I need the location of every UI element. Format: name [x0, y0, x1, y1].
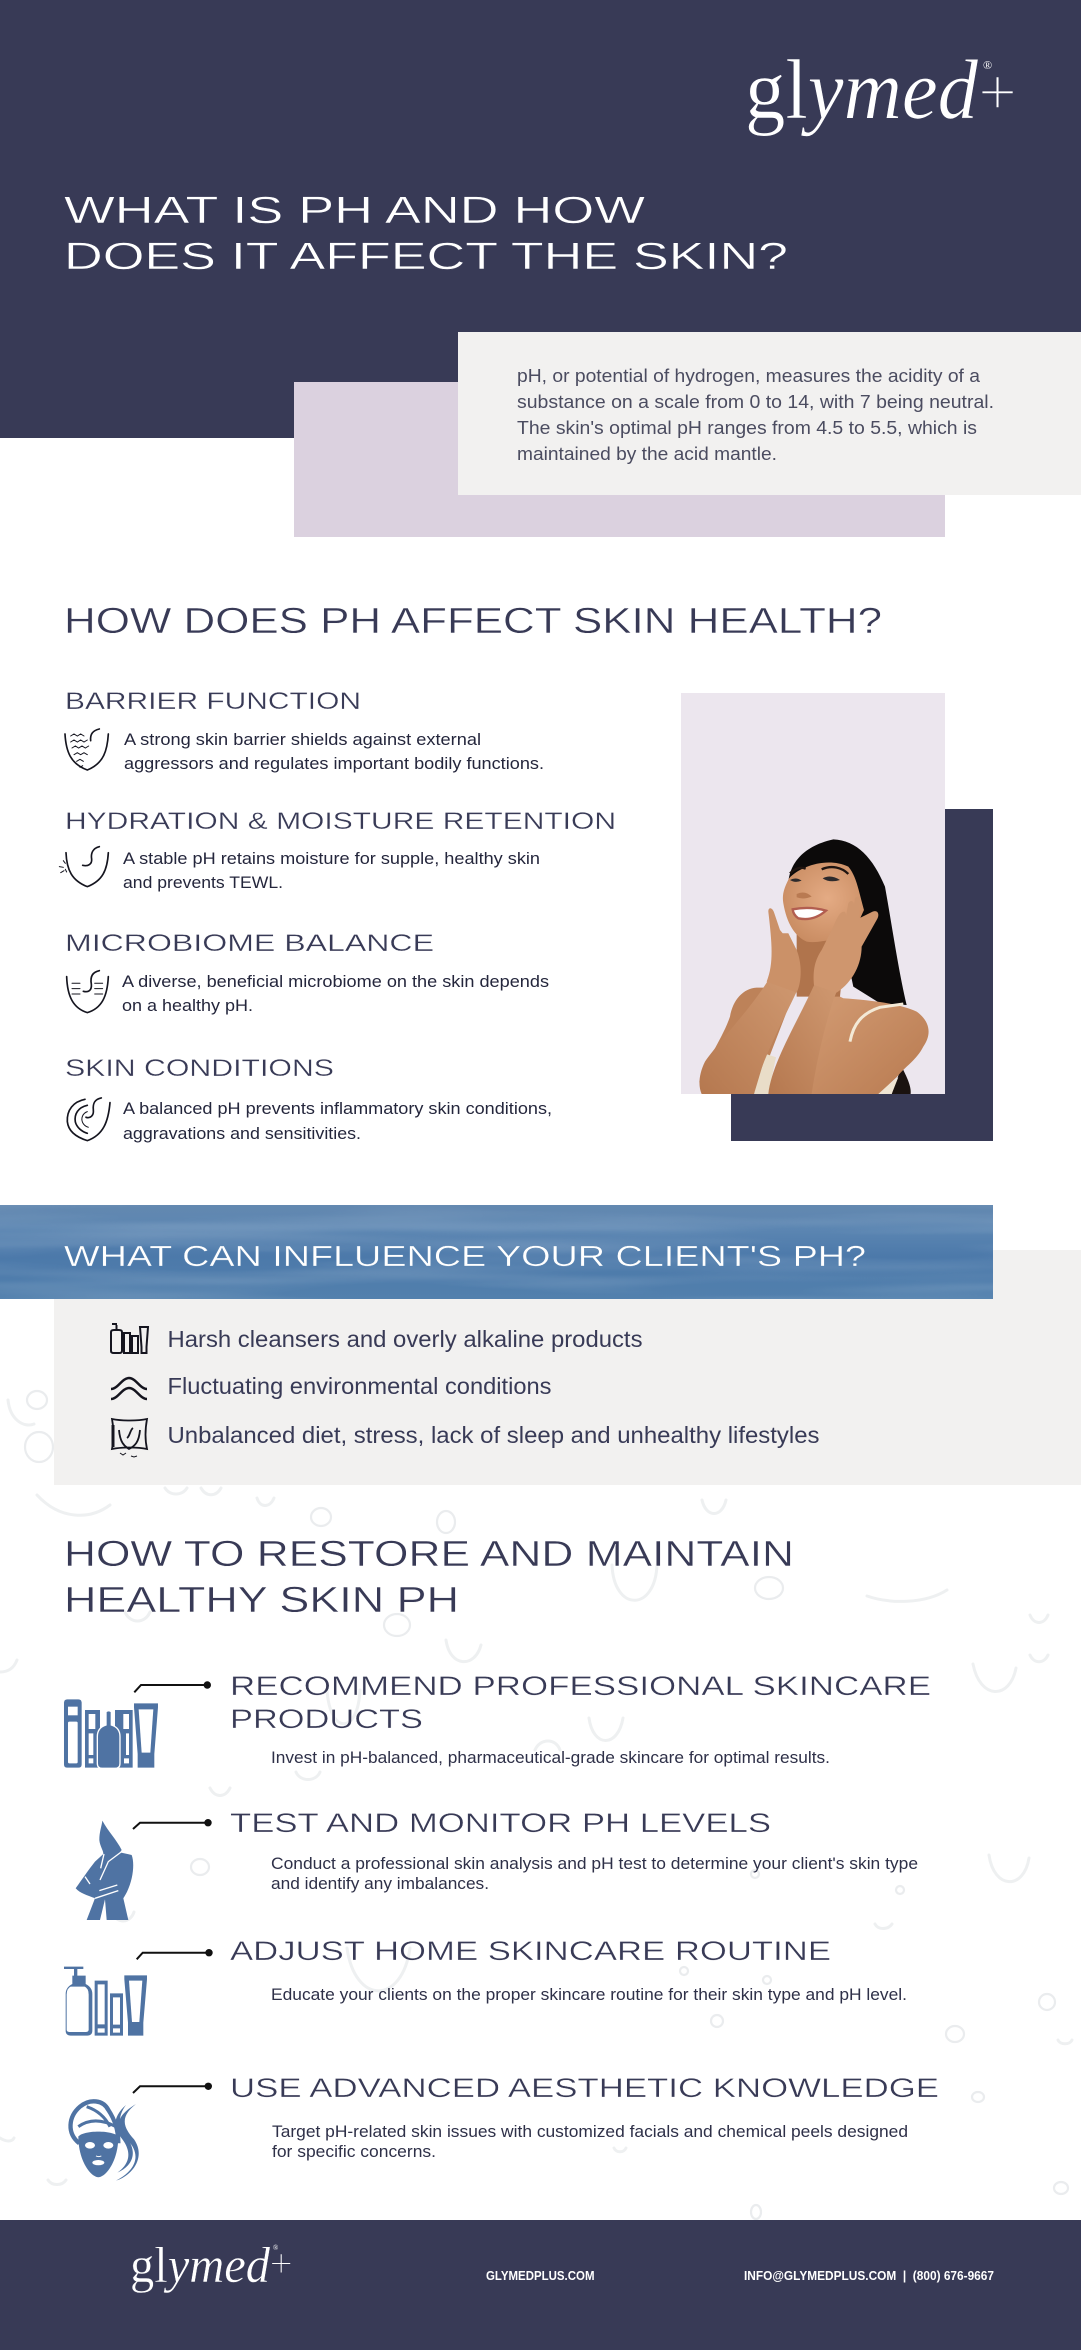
step text: Target pH-related skin issues with customized facials and chemical peels designed [272, 2123, 908, 2141]
bullet: environment: Fluctuating environmental conditions [168, 1373, 552, 1399]
photo panel [681, 693, 945, 1094]
footer logo: glymed [130, 2238, 270, 2294]
definition text: pH, or potential of hydrogen, measures the acidity of a [517, 365, 981, 386]
camisole front [754, 1054, 776, 1094]
skin conditions text: aggravations and sensitivities. [123, 1124, 361, 1143]
icon: products [111, 1324, 148, 1353]
step text: for specific concerns. [272, 2143, 436, 2161]
definition text: maintained by the acid mantle. [517, 443, 777, 464]
connector [137, 1949, 213, 1959]
hydration text: A stable pH retains moisture for supple, healthy skin [123, 849, 540, 868]
face [783, 863, 864, 942]
footer logo: ® [273, 2244, 279, 2252]
panel: microbiome [65, 930, 549, 1015]
icon: hydration face [59, 847, 108, 887]
near hand [814, 897, 878, 993]
far hand [767, 908, 801, 993]
step heading: ADJUST HOME SKINCARE ROUTINE [230, 1936, 831, 1966]
title: WHAT IS PH AND HOW [64, 190, 645, 232]
step heading: TEST AND MONITOR PH LEVELS [230, 1808, 771, 1838]
brows and eyes [790, 867, 848, 874]
step text: Conduct a professional skin analysis and pH test to determine your client's skin type [271, 1855, 918, 1873]
navy L backdrop [731, 809, 993, 1141]
panel: skin conditions: SKIN CONDITIONS [65, 1055, 334, 1082]
neck [797, 930, 847, 997]
contact: INFO@GLYMEDPLUS.COM | (800) 676-9667 [744, 2269, 994, 2283]
icon: professional woman [76, 1821, 133, 1920]
panel: hydration [59, 808, 616, 892]
barrier text [124, 730, 544, 773]
icon: barrier face [65, 729, 108, 770]
water band [0, 1205, 993, 1299]
logo: glymed+: glymed [745, 43, 978, 137]
microbiome text [122, 972, 549, 1015]
panel: barrier function [65, 688, 544, 773]
header panel [0, 0, 1081, 438]
hydration text: and prevents TEWL. [123, 873, 283, 892]
logo: glymed+: + [974, 54, 1020, 130]
panel: influences [54, 1250, 1081, 1485]
step heading: RECOMMEND PROFESSIONAL SKINCARE [230, 1671, 931, 1701]
lower camisole back [877, 1077, 898, 1094]
definition text [517, 365, 994, 464]
back hair [788, 839, 907, 1005]
lilac accent block [294, 382, 945, 537]
chest and far arm [810, 990, 929, 1094]
panel: microbiome: MICROBIOME BALANCE [65, 930, 434, 957]
connector [134, 1681, 211, 1692]
panel: pH definition [458, 332, 1081, 495]
microbiome text: on a healthy pH. [122, 996, 253, 1015]
icon: product set [64, 1699, 158, 1768]
step text [272, 2123, 908, 2161]
definition text: The skin's optimal pH ranges from 4.5 to 5.5, which is [517, 417, 977, 438]
step text: Educate your clients on the proper skincare routine for their skin type and pH level. [271, 1986, 907, 2004]
step: advanced knowledge [71, 2073, 939, 2181]
footer logo: + [267, 2240, 295, 2286]
photo: smiling woman touching her face [699, 839, 929, 1094]
microbiome text: A diverse, beneficial microbiome on the skin depends [122, 972, 549, 991]
footer [0, 2220, 1081, 2350]
water droplet background [0, 1391, 1072, 2219]
forearm two [768, 983, 837, 1094]
heading: band: WHAT CAN INFLUENCE YOUR CLIENT'S PH? [64, 1241, 866, 1273]
connector [133, 2083, 212, 2093]
skin conditions text [123, 1099, 552, 1143]
smile [793, 908, 826, 919]
connector [133, 1819, 212, 1829]
step: adjust routine [64, 1936, 907, 2036]
step heading [230, 1671, 931, 1734]
step heading: USE ADVANCED AESTHETIC KNOWLEDGE [230, 2073, 939, 2103]
icon: waves [111, 1378, 147, 1399]
forearm one [699, 980, 797, 1094]
icon: microbiome face [67, 971, 108, 1013]
heading: skin health: HOW DOES PH AFFECT SKIN HEALTH? [64, 600, 882, 641]
heading: restore and maintain: HEALTHY SKIN PH [64, 1579, 459, 1620]
definition text: substance on a scale from 0 to 14, with 7 being neutral. [517, 391, 994, 412]
step text: and identify any imbalances. [271, 1875, 489, 1893]
bullet: cleansers: Harsh cleansers and overly alkaline products [168, 1326, 642, 1352]
icon: pillow face [112, 1419, 147, 1457]
icon: home products [64, 1967, 147, 2036]
lower hair strand [892, 1067, 911, 1094]
hydration text [123, 849, 540, 892]
website: GLYMEDPLUS.COM [486, 2269, 594, 2283]
strap [850, 1004, 903, 1042]
icon: face mask [71, 2101, 139, 2181]
panel: barrier function: BARRIER FUNCTION [65, 688, 361, 715]
icon: skin conditions face [67, 1098, 110, 1141]
title [64, 190, 788, 278]
step heading: PRODUCTS [230, 1704, 423, 1734]
nose shadow [797, 892, 812, 898]
step text: Invest in pH-balanced, pharmaceutical-grade skincare for optimal results. [271, 1749, 830, 1767]
barrier text: aggressors and regulates important bodily functions. [124, 754, 544, 773]
heading: restore and maintain [64, 1533, 794, 1620]
panel: hydration: HYDRATION & MOISTURE RETENTION [65, 808, 616, 835]
panel: skin conditions [65, 1055, 552, 1143]
skin conditions text: A balanced pH prevents inflammatory skin conditions, [123, 1099, 552, 1118]
heading: restore and maintain: HOW TO RESTORE AND MAINTAIN [64, 1533, 794, 1574]
barrier text: A strong skin barrier shields against external [124, 730, 481, 749]
bullet: lifestyle: Unbalanced diet, stress, lack of sleep and unhealthy lifestyles [168, 1422, 820, 1448]
step: test and monitor [76, 1808, 918, 1920]
title: DOES IT AFFECT THE SKIN? [64, 236, 788, 278]
step: recommend products [64, 1671, 931, 1768]
logo: glymed+: ® [983, 58, 992, 72]
near shoulder [699, 988, 790, 1094]
step text [271, 1855, 918, 1893]
